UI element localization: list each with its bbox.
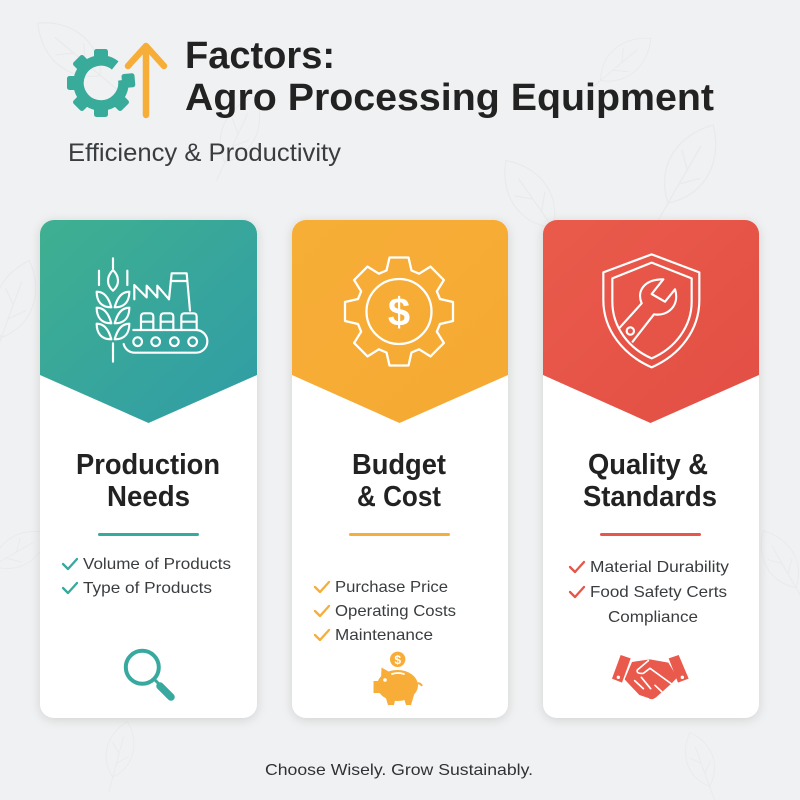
heading (583, 449, 717, 513)
checklist: Maintenance (335, 627, 433, 644)
icon: gear with dollar (345, 258, 453, 366)
heading (352, 449, 446, 513)
icon: orange up arrow (128, 46, 164, 115)
heading: Production (76, 449, 220, 481)
heading: Standards (583, 481, 717, 513)
icon: handshake (612, 655, 689, 699)
panel: quality and standards (543, 220, 759, 718)
divider (98, 533, 199, 536)
header logo: gear with arrow (67, 46, 164, 117)
divider (600, 533, 701, 536)
checklist: Purchase Price (335, 579, 448, 596)
icon: magnifying glass (126, 651, 171, 697)
checklist: Volume of Products (83, 556, 231, 573)
heading: Quality & (588, 449, 708, 481)
title: Factors: (185, 35, 335, 77)
checklist (570, 559, 729, 626)
checklist: Material Durability (590, 559, 729, 576)
footer tagline: Choose Wisely. Grow Sustainably. (265, 762, 533, 779)
red chevron header (543, 220, 759, 423)
heading: & Cost (357, 481, 441, 513)
orange chevron header (292, 220, 508, 423)
subtitle: Efficiency & Productivity (68, 139, 342, 167)
panel: budget and cost (292, 220, 508, 718)
checklist: Compliance (608, 609, 698, 626)
icon: piggy bank with coin: $ (394, 653, 401, 667)
heading: Budget (352, 449, 446, 481)
panel: production needs (40, 220, 257, 718)
checklist (63, 556, 231, 597)
divider (349, 533, 450, 536)
icon: teal gear (67, 49, 135, 117)
icon: piggy bank with coin (374, 652, 422, 705)
title (185, 35, 714, 119)
icon: wheat, factory and conveyor (97, 258, 207, 362)
teal chevron header (40, 220, 257, 423)
heading (76, 449, 220, 513)
checklist: Food Safety Certs (590, 584, 727, 601)
checklist (315, 579, 456, 644)
checklist: Operating Costs (335, 603, 456, 620)
icon: gear with dollar: $ (388, 290, 410, 334)
heading: Needs (107, 481, 190, 513)
title: Agro Processing Equipment (185, 77, 714, 119)
checklist: Type of Products (83, 580, 212, 597)
icon: shield with wrench (603, 254, 699, 367)
